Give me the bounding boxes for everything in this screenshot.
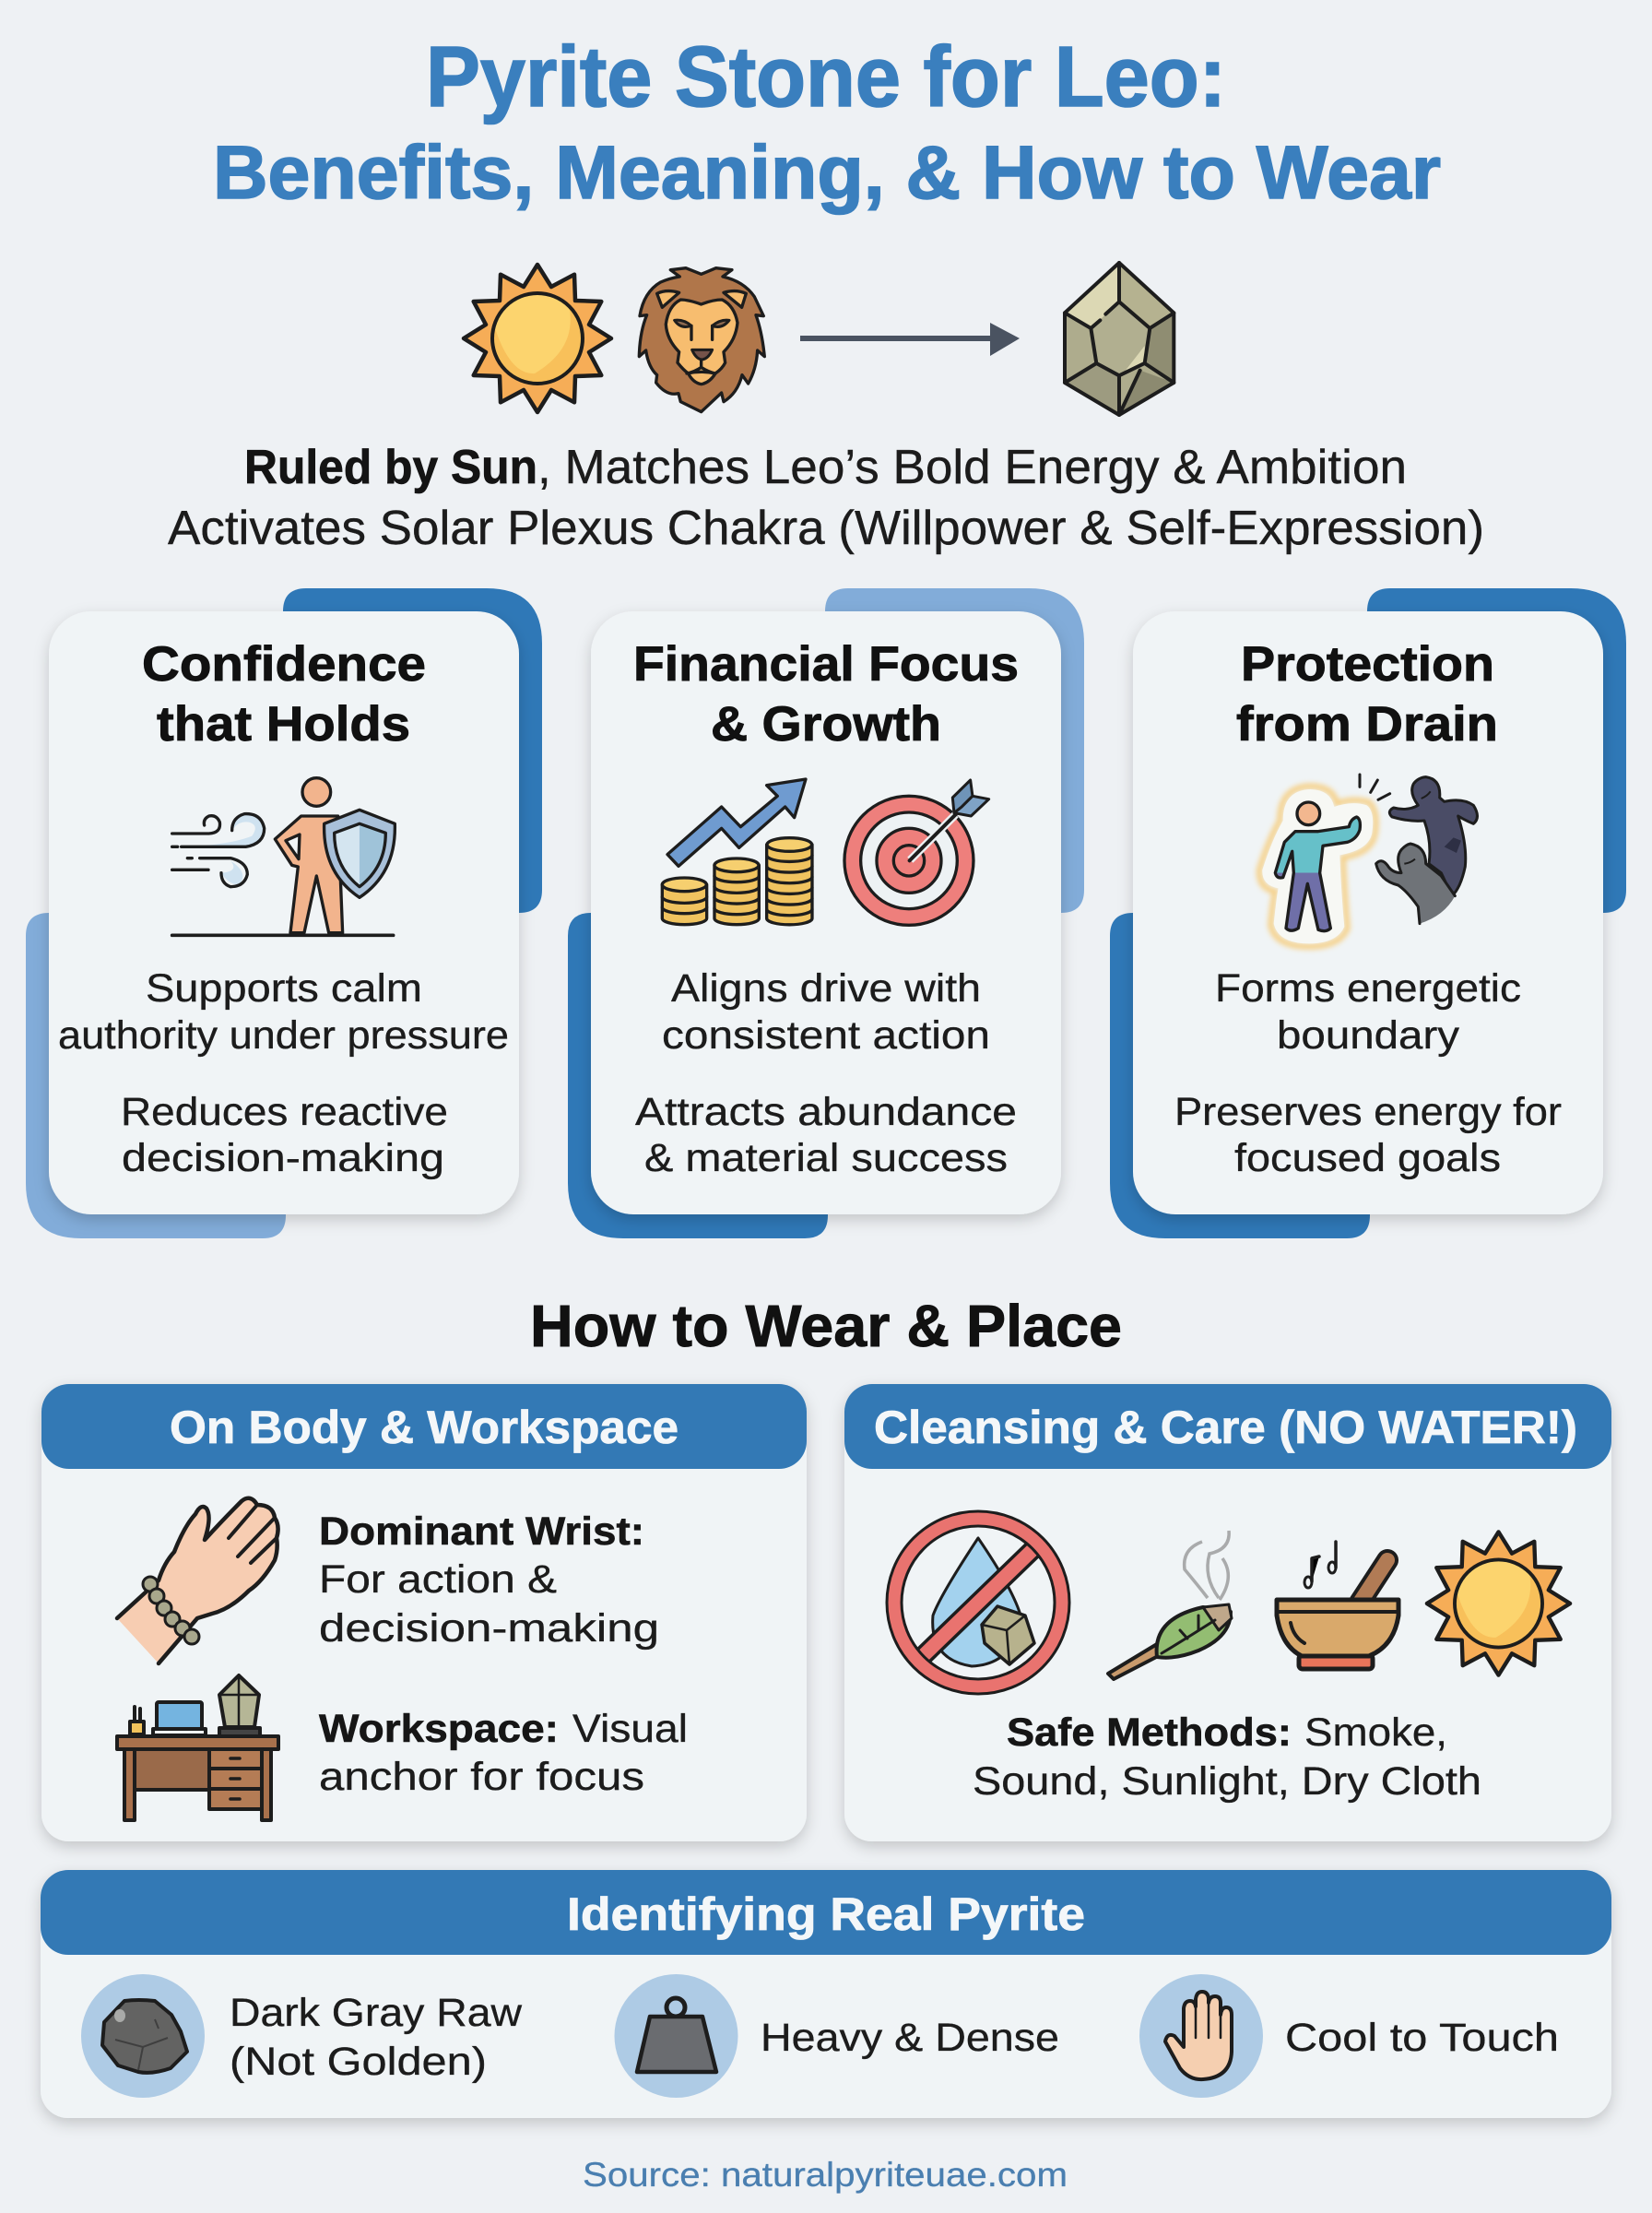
body text: [635, 966, 1017, 1180]
title: Benefits, Meaning, & How to Wear: [213, 131, 1441, 215]
body text: authority under pressure: [58, 1013, 509, 1058]
heading: [1236, 637, 1498, 751]
icon: singing bowl: [1277, 1542, 1398, 1669]
body text: Reduces reactive: [121, 1090, 448, 1134]
icon: person with shield in wind: [172, 778, 395, 935]
header: [844, 1384, 1611, 1469]
header: [41, 1870, 1611, 1955]
body text: Supports calm: [146, 966, 422, 1011]
icon: growth arrow and coins: [662, 779, 812, 925]
heading: Protection: [1241, 637, 1494, 692]
panel: Cleansing & Care: [844, 1384, 1611, 1841]
heading: from Drain: [1236, 697, 1498, 751]
body text: decision-making: [122, 1136, 444, 1180]
icon: hand with bracelet: [117, 1498, 278, 1663]
icon: pyrite gem: [1065, 263, 1174, 415]
text: safe methods: Safe Methods:: [1007, 1710, 1292, 1755]
text: safe methods: [973, 1710, 1481, 1804]
heading: that Holds: [157, 697, 410, 751]
body text: focused goals: [1234, 1136, 1501, 1180]
text: workspace: anchor for focus: [319, 1755, 644, 1799]
title: [213, 29, 1441, 215]
text: dominant wrist: [319, 1509, 659, 1651]
item: dark gray raw: (Not Golden): [230, 2040, 487, 2084]
heading: [142, 637, 426, 751]
icon: lion: [639, 268, 764, 412]
text: safe methods: Sound, Sunlight, Dry Cloth: [973, 1759, 1481, 1804]
body text: consistent action: [662, 1013, 990, 1058]
title: Pyrite Stone for Leo:: [426, 29, 1226, 124]
source: Source: naturalpyriteuae.com: [583, 2156, 1068, 2194]
item: dark gray raw: Dark Gray Raw: [230, 1991, 523, 2035]
header: Identifying Real Pyrite: [567, 1888, 1085, 1940]
icon: desk with crystal: [117, 1675, 278, 1820]
panel: On Body & Workspace: [41, 1384, 807, 1841]
icon: person in aura repelling shadows: [1259, 775, 1477, 947]
header: On Body & Workspace: [170, 1402, 678, 1453]
text: workspace: Workspace:: [319, 1707, 559, 1751]
body text: [58, 966, 509, 1180]
item: cool to touch: [1139, 1974, 1559, 2098]
heading: Confidence: [142, 637, 426, 692]
text block: Leo intro: Ruled by Sun: [244, 441, 537, 494]
text: workspace: Visual: [572, 1707, 688, 1751]
arrow: [800, 323, 1020, 356]
heading: & Growth: [711, 697, 941, 751]
heading: Financial Focus: [633, 637, 1019, 692]
heading: [633, 637, 1019, 751]
icon: target with dart: [844, 780, 989, 925]
panel: Identifying Real Pyrite: [41, 1870, 1611, 2118]
text: dominant wrist: decision-making: [319, 1606, 659, 1651]
header: [41, 1384, 807, 1469]
icon: sun: [1427, 1532, 1570, 1675]
item: cool to touch: Cool to Touch: [1285, 2016, 1559, 2060]
text block: Leo intro: Activates Solar Plexus Chakra (Willpower & Self-Expression): [168, 502, 1484, 555]
header: Cleansing & Care (NO WATER!): [874, 1402, 1577, 1453]
text: dominant wrist: Dominant Wrist:: [319, 1509, 644, 1554]
heading: How to Wear & Place: How to Wear & Place: [530, 1293, 1122, 1359]
item: heavy and dense: [614, 1974, 1059, 2098]
body text: Attracts abundance: [635, 1090, 1017, 1134]
text: safe methods: Smoke,: [1304, 1710, 1447, 1755]
body text: [1174, 966, 1562, 1180]
text: dominant wrist: For action &: [319, 1557, 557, 1602]
panel: Financial Focus & Growth: [568, 588, 1084, 1238]
text: workspace: [319, 1707, 688, 1799]
body text: & material success: [644, 1136, 1008, 1180]
icon: smoking sage: [1108, 1531, 1232, 1679]
icon: sun: [464, 265, 611, 412]
body text: Preserves energy for: [1174, 1090, 1562, 1134]
text block: Leo intro: , Matches Leo’s Bold Energy & Ambition: [537, 441, 1407, 494]
icon: no water: [894, 1519, 1062, 1686]
text block: Leo intro: [168, 441, 1484, 555]
body text: Forms energetic: [1215, 966, 1521, 1011]
item: heavy and dense: Heavy & Dense: [761, 2016, 1059, 2060]
body text: boundary: [1277, 1013, 1460, 1058]
panel: Confidence that Holds: [26, 588, 542, 1238]
panel: Protection from Drain: [1110, 588, 1626, 1238]
item: dark gray raw: [81, 1974, 523, 2098]
body text: Aligns drive with: [671, 966, 981, 1011]
